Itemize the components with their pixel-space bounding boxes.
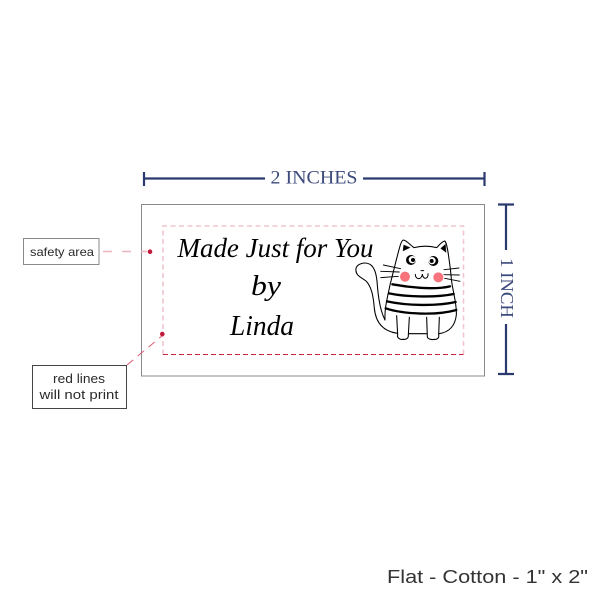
cat mouth	[415, 271, 428, 279]
red cut line	[163, 354, 464, 356]
top dimension: 2 inches	[144, 168, 484, 188]
callout: safety area	[24, 238, 99, 264]
safety area dashed border	[163, 226, 464, 354]
callout: red lines will not print: red lines	[53, 372, 105, 386]
cat body outline	[385, 240, 456, 334]
cat ears	[403, 244, 446, 252]
cat stripes	[386, 284, 456, 314]
callout: safety area: safety area	[30, 245, 94, 259]
callout: red lines will not print: will not print	[38, 388, 119, 402]
top dimension: 2 inches: 2 INCHES	[270, 168, 358, 188]
cat tail	[356, 263, 397, 333]
label text: by: by	[251, 270, 281, 302]
icon: striped cat	[356, 240, 460, 340]
product caption: Flat - Cotton - 1" x 2"	[387, 566, 588, 587]
cat whiskers	[381, 265, 460, 281]
callout: red lines will not print	[32, 366, 126, 408]
cat cheeks	[400, 272, 443, 282]
right dimension: 1 inch	[497, 204, 517, 374]
red lines leader line	[127, 332, 165, 365]
right dimension: 1 inch: 1 INCH	[497, 258, 517, 318]
label text: Linda: Linda	[229, 310, 294, 342]
cat body	[385, 240, 456, 334]
label text: Made Just for You: Made Just for You	[177, 233, 374, 263]
label outline	[142, 204, 484, 376]
cat legs	[397, 316, 439, 340]
cat eyes	[406, 255, 438, 266]
safety area leader line	[103, 249, 152, 254]
